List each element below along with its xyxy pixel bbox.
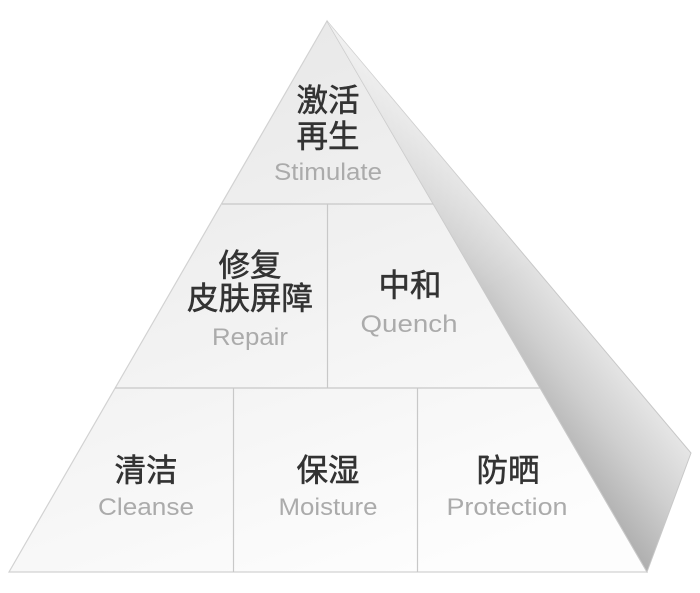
label: Quench: [360, 267, 458, 338]
label: Quench: Quench: [360, 311, 458, 338]
label: Stimulate: 激活: [296, 82, 360, 118]
label: Repair: 皮肤屏障: [187, 280, 313, 316]
label: Moisture: 保湿: [296, 452, 360, 488]
tier dividers: [115, 204, 540, 572]
label: Stimulate: 再生: [296, 118, 360, 154]
label: Cleanse: Cleanse: [98, 494, 194, 521]
pyramid shaded side face: [327, 21, 691, 572]
label: Cleanse: 清洁: [114, 452, 178, 488]
label: Moisture: [278, 452, 378, 521]
label: Stimulate: Stimulate: [274, 159, 382, 186]
label: Cleanse: [98, 452, 194, 521]
label: Repair: 修复: [218, 247, 282, 283]
label: Protection: Protection: [446, 494, 568, 521]
label: Repair: [187, 247, 313, 351]
label: Stimulate: [274, 82, 382, 186]
label: Protection: 防晒: [476, 452, 540, 488]
label: Protection: [446, 452, 568, 521]
label: Quench: 中和: [378, 267, 442, 303]
label: Repair: Repair: [212, 324, 288, 351]
label: Moisture: Moisture: [278, 494, 378, 521]
